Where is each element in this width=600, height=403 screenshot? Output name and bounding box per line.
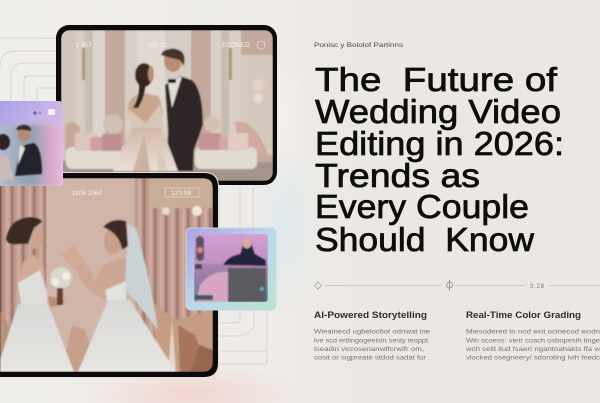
body text: Miesodered to nod wot ocinecod wodn (466, 328, 600, 336)
column: AI-Powered Storytelling (314, 310, 431, 362)
card icons (33, 109, 55, 115)
heading: Real-Time Color Grading (466, 310, 581, 320)
title: Every Couple (315, 189, 529, 226)
title: Should Know (315, 222, 535, 259)
video overlay labels (72, 188, 199, 197)
title: Editing in 2026: (315, 126, 564, 163)
decorative line pattern: left (0, 38, 56, 100)
title (315, 62, 564, 259)
video overlay labels: 1106 1060 (72, 190, 103, 197)
body text: vlocked ssegneery/ sdoroting ivih fnedc (466, 354, 600, 362)
title: Wedding Video (315, 94, 561, 131)
left bride (15, 255, 46, 300)
decorative line pattern: right (219, 188, 267, 364)
timeline date: 3.28 (530, 284, 545, 290)
right bride (73, 256, 126, 298)
panel: small purple card (0, 101, 63, 186)
video overlay labels: ECONED (222, 42, 250, 49)
card photo: couple (0, 125, 42, 180)
video overlay labels: 100 30 (147, 42, 167, 49)
body text (465, 328, 600, 362)
body text: cosit or sigpreate stdod sadat for (314, 354, 426, 362)
video overlay labels: 120:99 (171, 190, 191, 197)
body text: Wieainecd ugbelocfiot odriwat ine (314, 328, 431, 336)
body text: lseadin vicrosenanwtfcrwifr om, (314, 346, 424, 353)
body text: Win scoess: vietr coach osbopesih tinge (466, 338, 600, 344)
panel: top photo frame (56, 25, 277, 185)
icon: diamond (314, 282, 322, 289)
video overlay labels (72, 41, 265, 49)
eyebrow text: Ponisc y Bololof Partinns (314, 42, 403, 49)
body text: wch cellt ilud fsaert ngantnahakts ffa w (465, 346, 600, 353)
body text (314, 328, 431, 362)
photo: couple in salon (61, 30, 273, 181)
title: The Future of (315, 62, 558, 99)
timeline (314, 280, 600, 291)
bride (126, 92, 164, 124)
card screen (194, 234, 268, 302)
groom (165, 76, 203, 171)
video overlay labels: : 1 457 (72, 42, 92, 49)
panel: bottom photo frame (0, 172, 219, 378)
title: Trends as (315, 158, 480, 195)
column: Real-Time Color Grading (465, 310, 600, 362)
photo: two brides (0, 178, 213, 372)
icon: node (446, 280, 452, 291)
panel: small iridescent card (186, 228, 276, 310)
heading: AI-Powered Storytelling (314, 310, 427, 320)
body text: lve scd ertlingogeeisin sesty ieoppt (314, 338, 428, 344)
